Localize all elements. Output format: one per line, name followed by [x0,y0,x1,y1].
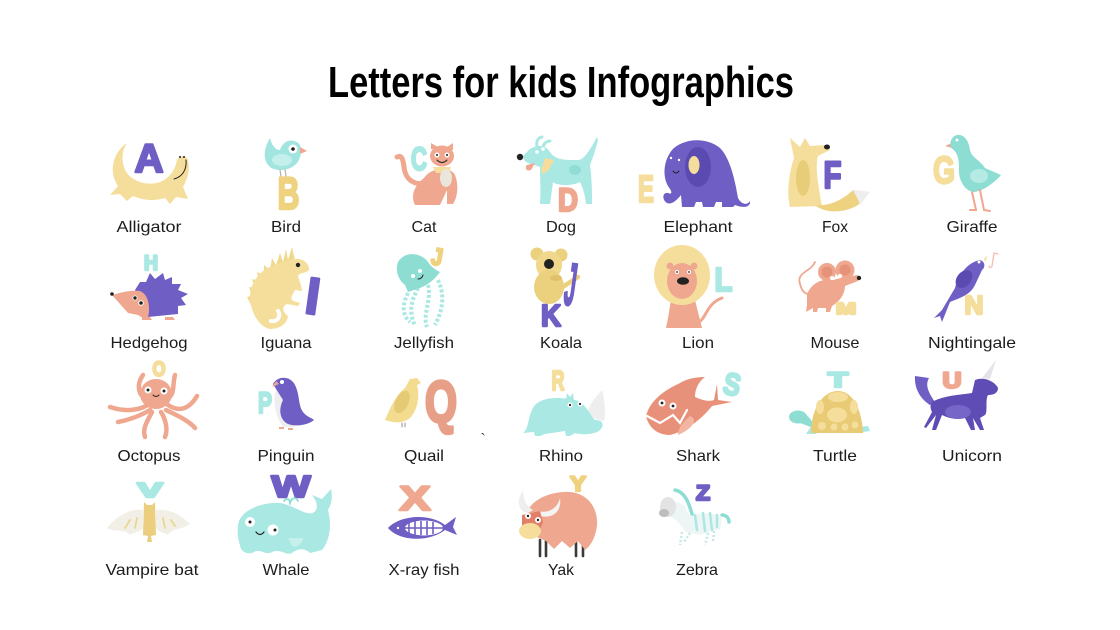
label: Bird [271,219,301,236]
label: Rhino [539,448,583,465]
label: Cat [412,219,437,236]
panel: lion [654,245,732,352]
panel: koala: J [561,251,581,318]
icon: iguana [247,247,309,329]
title: Letters for kids Infographics [328,58,794,107]
icon: yak [519,491,597,556]
icon: turtle [789,391,870,434]
panel: koala [530,248,582,352]
letter L: L [714,261,732,298]
panel: mouse [799,260,861,352]
panel: zebra [659,482,729,579]
panel: x-ray fish [388,480,460,579]
letter E: E [638,169,654,211]
letter Z: Z [696,482,710,505]
letter R: R [552,365,564,396]
panel: unicorn [915,360,1002,465]
letter Y: Y [570,473,586,496]
label: Koala [540,335,582,352]
letter C: C [411,141,427,177]
label: Zebra [676,562,718,579]
icon: nightingale [934,253,998,322]
panel: dog [517,137,598,236]
panel: yak [519,473,597,579]
letter I: I [302,267,324,327]
icon: octopus [110,375,197,437]
label: Alligator [116,219,182,236]
label: Fox [822,219,848,236]
icon: dog [517,137,598,204]
icon: alligator [110,143,189,204]
icon: x-ray fish [388,517,457,539]
letter H: H [144,252,158,275]
label: Unicorn [942,448,1002,465]
panel: quail [385,370,485,465]
icon: hedgehog [110,273,188,320]
icon: jellyfish [397,254,442,327]
letter W: W [272,469,311,504]
icon: fox [788,138,870,211]
icon: pinguin [272,378,314,430]
letter A: A [134,137,164,181]
letter M: M [836,301,856,318]
icon: shark [646,377,732,435]
icon: bird [265,138,307,176]
label: Lion [682,335,714,352]
stray mark [481,433,485,436]
panel: giraffe [933,135,1001,236]
icon: zebra [659,490,729,545]
icon: lion [654,245,722,328]
letter N: N [964,290,984,320]
panel: fox [788,138,870,236]
icon: quail [385,378,421,427]
panel: turtle [789,369,870,465]
letter B: B [278,168,300,219]
label: Elephant [664,219,733,236]
label: Iguana [260,335,312,352]
label: Nightingale [928,335,1016,352]
letter G: G [933,150,955,192]
label: Dog [546,219,576,236]
label: Quail [404,448,444,465]
letter P: P [258,387,272,420]
panel: iguana [247,247,324,352]
icon: whale [238,489,332,554]
panel: octopus [110,358,197,465]
icon: giraffe [945,135,1001,211]
letter V: V [138,480,164,502]
panel: cat [397,141,457,236]
label: X-ray fish [388,562,460,579]
letter U: U [942,368,962,393]
letter X: X [400,480,431,518]
label: Octopus [118,448,180,465]
label: Vampire bat [106,562,199,579]
panel: jellyfish [394,243,454,352]
letter O: O [152,358,166,381]
label: Pinguin [258,448,314,465]
letter K: K [541,298,562,333]
panel: whale [238,469,332,579]
label: Jellyfish [394,335,454,352]
panel: vampire bat [106,480,199,579]
panel: hedgehog [110,252,188,352]
letter F: F [824,155,842,197]
label: Mouse [810,335,860,352]
label: Turtle [813,448,857,465]
label: Yak [548,562,575,579]
icon: rhino [523,390,605,436]
letter S: S [720,366,744,403]
label: Shark [676,448,721,465]
panel: elephant [638,140,750,236]
letter Q: Q [425,370,457,435]
panel: nightingale [928,253,1016,352]
icon: elephant [663,140,750,207]
label: Giraffe [946,219,998,236]
icon: cat [397,143,457,205]
panel: bird [265,138,307,236]
letter D: D [558,182,578,218]
panel: shark [646,366,744,465]
panel: pinguin [258,378,314,465]
label: Hedgehog [110,335,188,352]
icon: unicorn [915,360,998,430]
icon: mouse [799,260,861,312]
icon: koala [530,248,578,304]
letter J: J [429,243,445,272]
label: Whale [262,562,310,579]
panel: rhino [523,365,605,465]
panel: alligator [110,137,189,236]
letter T: T [828,369,848,392]
icon: vampire bat [107,502,190,542]
